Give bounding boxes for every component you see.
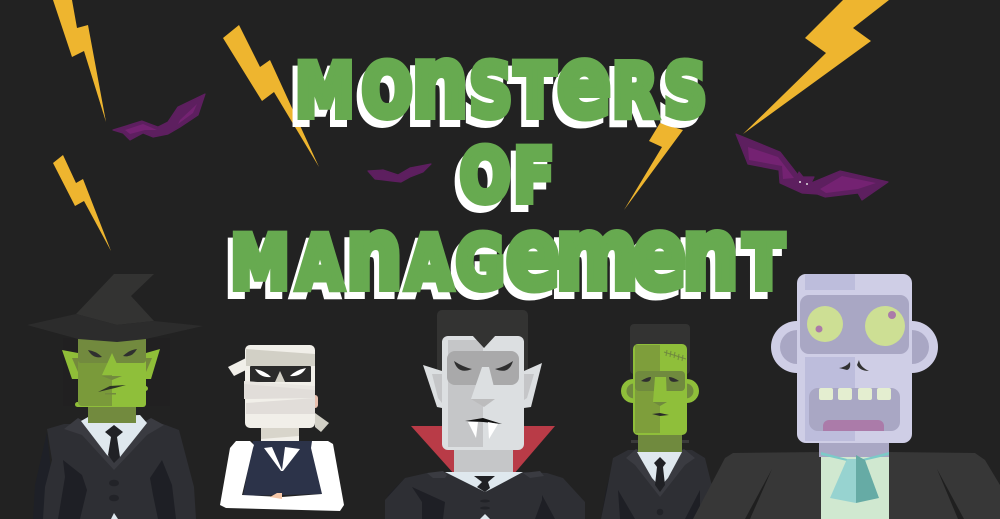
title: MOnSTeRS [290,33,702,147]
dracula [385,310,585,519]
witch [33,338,196,519]
mummy [220,345,344,511]
bats [113,94,888,200]
title: MAnAGemenT [226,205,779,319]
frankenstein [601,324,717,519]
hat [27,274,203,342]
zombie [693,274,1000,519]
title: OF [460,133,554,219]
scar [664,350,686,361]
title [226,26,784,319]
lightning bolts [53,0,889,251]
title: MOnSTeRS [295,26,707,140]
title: MAnAGemenT [231,198,784,312]
title: OF [455,140,549,226]
